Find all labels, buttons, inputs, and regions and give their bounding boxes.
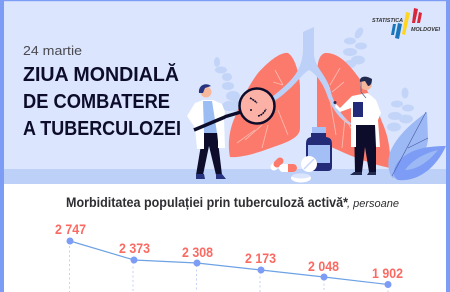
trend line xyxy=(70,241,388,284)
chart heading: , persoane xyxy=(347,198,399,210)
icon: magnifying glass xyxy=(224,88,274,124)
data points xyxy=(66,238,392,288)
drop lines xyxy=(70,246,388,292)
icon: doctor with stethoscope xyxy=(334,77,381,175)
icon: background leaves xyxy=(214,26,414,132)
data labels: 2 308 xyxy=(182,245,213,260)
logo: Statistica Moldovei: MOLDOVEI xyxy=(411,27,440,33)
icon: pills xyxy=(274,156,317,182)
logo: Statistica Moldovei: STATISTICA xyxy=(372,18,403,24)
line chart xyxy=(55,222,403,292)
panel: header background xyxy=(4,1,446,184)
data labels: 2 747 xyxy=(55,222,86,237)
date label: 24 martie xyxy=(23,43,82,58)
icon: lungs xyxy=(229,27,390,168)
chart heading: Morbiditatea populației prin tuberculoză activă* xyxy=(66,195,349,210)
icon: medicine bottle xyxy=(306,127,332,171)
data labels xyxy=(55,222,403,281)
logo: Statistica Moldovei xyxy=(372,8,440,39)
icon: doctor with magnifier xyxy=(187,84,226,179)
title: ZIUA MONDIALĂ xyxy=(23,63,179,86)
title: DE COMBATERE xyxy=(23,91,170,113)
data labels: 2 373 xyxy=(119,241,150,256)
title xyxy=(23,63,181,140)
title: A TUBERCULOZEI xyxy=(23,118,181,140)
data labels: 2 173 xyxy=(245,251,276,266)
data labels: 1 902 xyxy=(372,266,403,281)
icon: large leaves xyxy=(388,112,446,180)
data labels: 2 048 xyxy=(308,259,339,274)
